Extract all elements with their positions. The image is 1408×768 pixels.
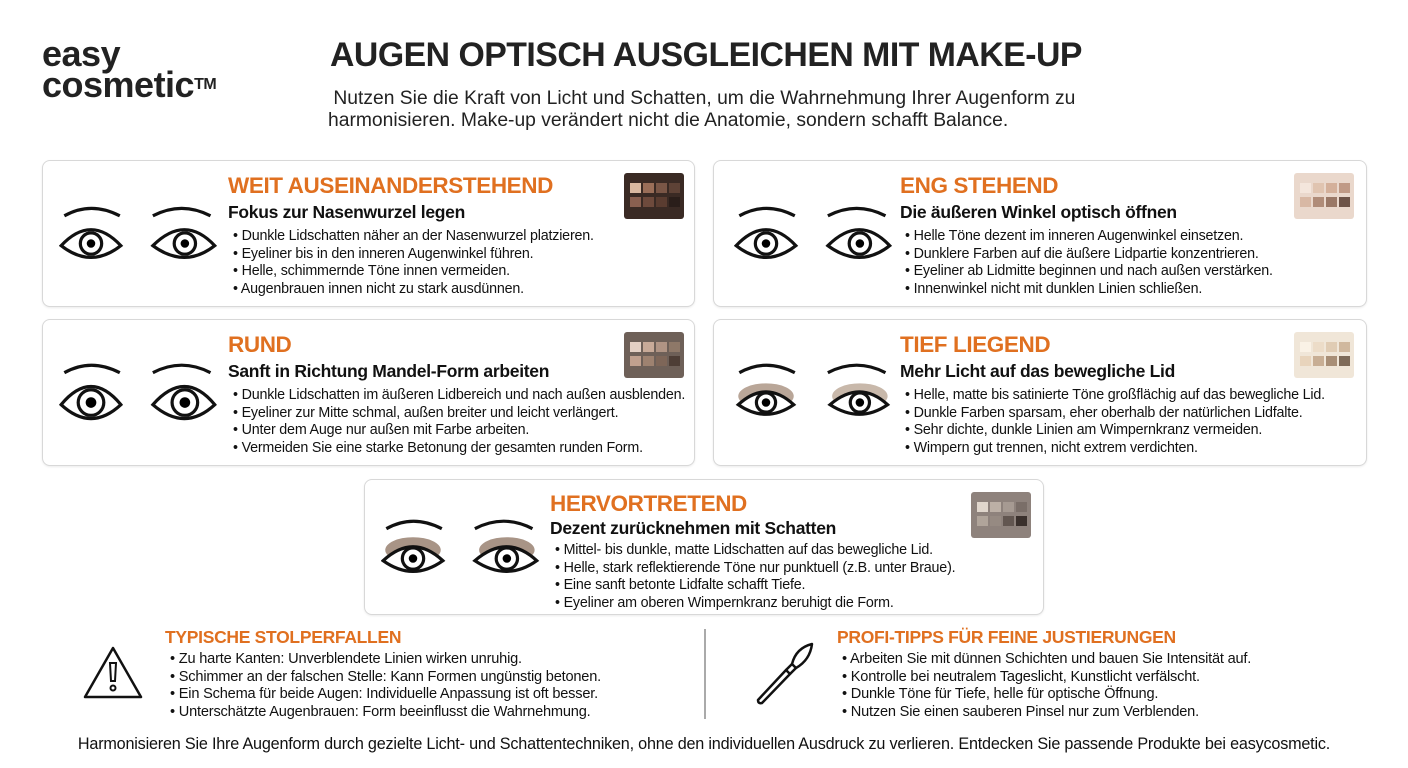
footer text: Harmonisieren Sie Ihre Augenform durch gezielte Licht- und Schattentechniken, ohne den individuellen Ausdruck zu verlieren. Entdecken Sie passende Produkte bei easycosmetic. — [78, 735, 1330, 753]
bullets: Helle, matte bis satinierte Töne großflächig auf das bewegliche Lid. — [914, 387, 1325, 403]
bullets: Dunklere Farben auf die äußere Lidpartie konzentrieren. — [914, 246, 1259, 262]
bullets: Eyeliner am oberen Wimpernkranz beruhigt die Form. — [564, 595, 894, 611]
section: profi-tipps: Kontrolle bei neutralem Tageslicht, Kunstlicht verfälscht. — [851, 668, 1200, 684]
icon: palette — [624, 332, 684, 378]
icon: warning triangle — [84, 646, 142, 698]
subheading: Die äußeren Winkel optisch öffnen — [900, 202, 1177, 222]
bullets: Eine sanft betonte Lidfalte schafft Tiefe. — [564, 577, 805, 593]
logo — [42, 33, 216, 105]
panel: hervortretend — [364, 479, 1044, 615]
icon: eyes — [59, 206, 217, 259]
bullets — [234, 228, 594, 297]
bullets: Sehr dichte, dunkle Linien am Wimpernkranz vermeiden. — [914, 422, 1262, 438]
bullets — [906, 228, 1273, 297]
bullets — [906, 387, 1325, 456]
section: stolperfallen: Unterschätzte Augenbrauen: Form beeinflusst die Wahrnehmung. — [179, 704, 590, 720]
heading: TIEF LIEGEND — [900, 332, 1050, 357]
panel: weit auseinanderstehend — [42, 160, 695, 307]
bullets: Helle, stark reflektierende Töne nur punktuell (z.B. unter Braue). — [564, 560, 955, 576]
icon: brush — [756, 642, 814, 704]
bullets: Helle, schimmernde Töne innen vermeiden. — [242, 263, 510, 279]
bullets: Vermeiden Sie eine starke Betonung der gesamten runden Form. — [242, 440, 643, 456]
panel: rund — [42, 319, 695, 466]
heading: HERVORTRETEND — [550, 491, 747, 516]
section: profi-tipps: PROFI-TIPPS FÜR FEINE JUSTIERUNGEN — [837, 627, 1176, 647]
icon: palette — [1294, 332, 1354, 378]
subtitle: Nutzen Sie die Kraft von Licht und Schatten, um die Wahrnehmung Ihrer Augenform zu — [333, 88, 1075, 109]
subtitle: harmonisieren. Make-up verändert nicht die Anatomie, sondern schafft Balance. — [328, 110, 1008, 131]
section: profi-tipps: Arbeiten Sie mit dünnen Schichten und bauen Sie Intensität auf. — [850, 651, 1251, 667]
heading: WEIT AUSEINANDERSTEHEND — [228, 173, 553, 198]
bullets: Unter dem Auge nur außen mit Farbe arbeiten. — [242, 422, 529, 438]
bullets: Innenwinkel nicht mit dunklen Linien schließen. — [914, 281, 1202, 297]
icon: palette — [1294, 173, 1354, 219]
bullets: Eyeliner ab Lidmitte beginnen und nach außen verstärken. — [914, 263, 1273, 279]
heading: ENG STEHEND — [900, 173, 1058, 198]
panel: eng stehend — [713, 160, 1367, 307]
icon: palette — [624, 173, 684, 219]
icon: eyes — [734, 206, 892, 259]
section: profi-tipps — [837, 627, 1251, 720]
bullets: Dunkle Lidschatten im äußeren Lidbereich und nach außen ausblenden. — [242, 387, 685, 403]
bullets: Mittel- bis dunkle, matte Lidschatten auf das bewegliche Lid. — [564, 542, 933, 558]
section: stolperfallen — [165, 627, 601, 720]
title: AUGEN OPTISCH AUSGLEICHEN MIT MAKE-UP — [330, 36, 1082, 74]
icon: palette — [971, 492, 1031, 538]
subheading: Mehr Licht auf das bewegliche Lid — [900, 361, 1175, 381]
section: stolperfallen: Ein Schema für beide Augen: Individuelle Anpassung ist oft besser. — [179, 686, 598, 702]
logo: cosmeticTM — [42, 64, 216, 105]
logo: easy — [42, 33, 120, 74]
section: stolperfallen: TYPISCHE STOLPERFALLEN — [165, 627, 401, 647]
bullets: Dunkle Lidschatten näher an der Nasenwurzel platzieren. — [242, 228, 594, 244]
section: profi-tipps: Dunkle Töne für Tiefe, helle für optische Öffnung. — [851, 686, 1158, 702]
bullets — [556, 542, 955, 611]
bullets: Eyeliner bis in den inneren Augenwinkel führen. — [242, 246, 533, 262]
bullets — [234, 387, 685, 456]
icon: eyes — [59, 364, 217, 420]
section: stolperfallen: Schimmer an der falschen Stelle: Kann Formen ungünstig betonen. — [179, 668, 601, 684]
subheading: Dezent zurücknehmen mit Schatten — [550, 518, 836, 538]
heading: RUND — [228, 332, 291, 357]
bullets: Dunkle Farben sparsam, eher oberhalb der natürlichen Lidfalte. — [914, 405, 1303, 421]
icon: eyes — [381, 520, 540, 573]
section: stolperfallen: Zu harte Kanten: Unverblendete Linien wirken unruhig. — [179, 651, 522, 667]
subtitle — [328, 88, 1075, 131]
panel: tief liegend — [713, 319, 1367, 466]
bullets: Helle Töne dezent im inneren Augenwinkel einsetzen. — [914, 228, 1243, 244]
bullets: Eyeliner zur Mitte schmal, außen breiter und leicht verlängert. — [242, 405, 618, 421]
section: profi-tipps: Nutzen Sie einen sauberen Pinsel nur zum Verblenden. — [851, 704, 1199, 720]
subheading: Sanft in Richtung Mandel-Form arbeiten — [228, 361, 549, 381]
subheading: Fokus zur Nasenwurzel legen — [228, 202, 465, 222]
bullets: Augenbrauen innen nicht zu stark ausdünnen. — [241, 281, 524, 297]
icon: eyes — [736, 364, 890, 416]
bullets: Wimpern gut trennen, nicht extrem verdichten. — [914, 440, 1198, 456]
